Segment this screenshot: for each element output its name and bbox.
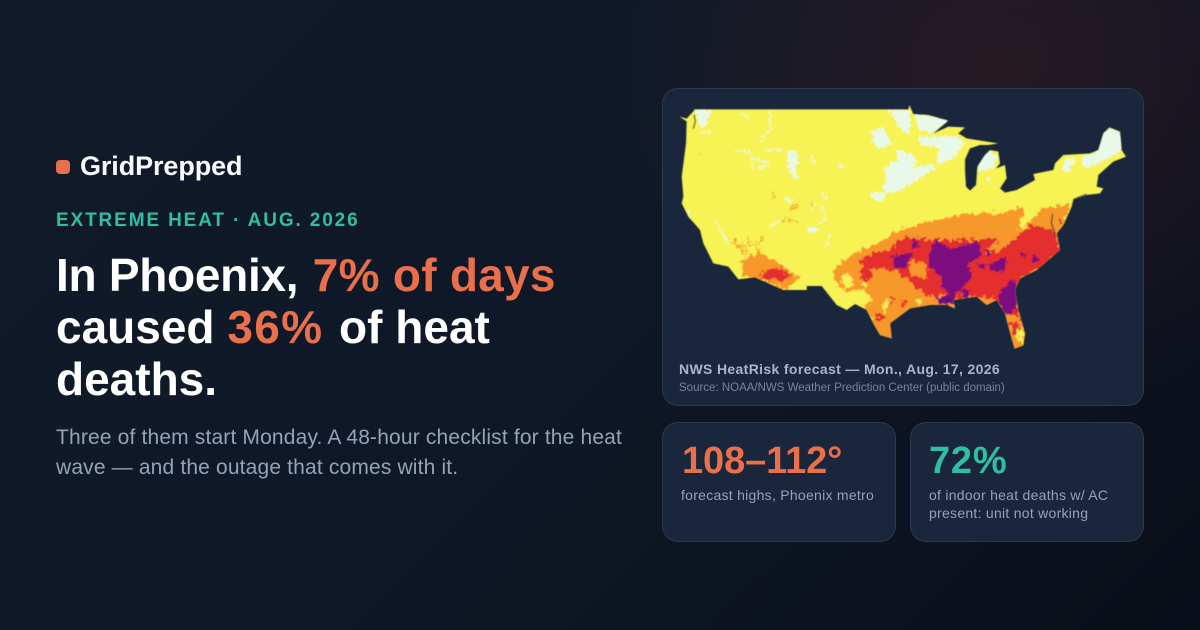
purple extreme risk (892, 239, 1039, 315)
stat label: of indoor heat deaths w/ AC (929, 487, 1108, 503)
stat value: 72% (929, 440, 1007, 482)
headline: In Phoenix, 7% of days (56, 249, 556, 301)
subheading: Three of them start Monday. A 48-hour checklist for the heat (56, 426, 622, 449)
yellow pockets in south (839, 272, 1026, 345)
headline: caused 36% of heat (56, 301, 490, 353)
brand name: GridPrepped (80, 151, 242, 181)
stat label (929, 487, 1108, 521)
subheading (56, 426, 622, 479)
panel: heat risk map (662, 88, 1144, 406)
eyebrow: EXTREME HEAT · AUG. 2026 (56, 210, 360, 231)
yellow base (680, 104, 1126, 349)
orange pockets in red (870, 242, 1010, 280)
map: HeatRisk forecast (680, 104, 1126, 350)
orange moderate risk (699, 155, 1072, 351)
water: Chesapeake, Puget Sound, lakes (693, 115, 1087, 329)
red major risk (762, 225, 1062, 337)
stat label: present: unit not working (929, 505, 1088, 521)
stat value: 108–112° (682, 440, 842, 482)
headline (56, 249, 556, 405)
subheading: wave — and the outage that comes with it. (56, 456, 458, 479)
icon: brand square (56, 160, 70, 174)
headline: deaths. (56, 353, 217, 405)
stat card: forecast highs (662, 422, 896, 542)
map title: NWS HeatRisk forecast — Mon., Aug. 17, 2026 (679, 361, 1000, 377)
brand logo (56, 151, 242, 181)
stat card: indoor deaths (910, 422, 1144, 542)
map source: Source: NOAA/NWS Weather Prediction Center (public domain) (679, 382, 1005, 394)
stat label: forecast highs, Phoenix metro (681, 487, 874, 503)
pale low risk areas (687, 110, 1122, 247)
